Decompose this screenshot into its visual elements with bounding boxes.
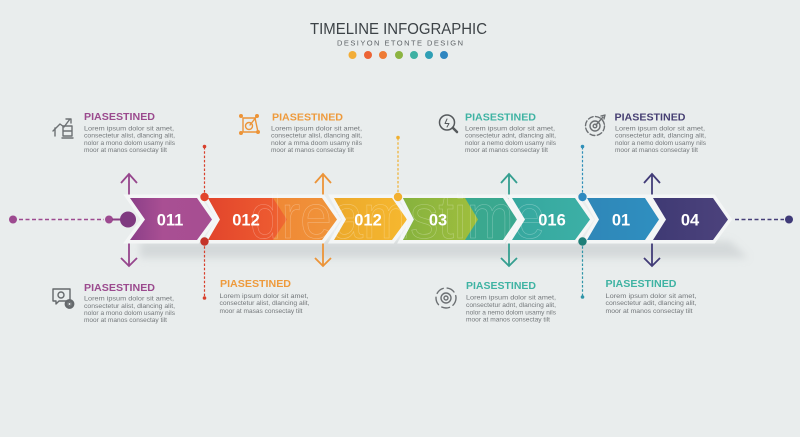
segment numbers: 01: [612, 212, 630, 230]
marker: dark red bottom: [200, 237, 209, 300]
text block: top 3: moor at manos consectay tilt: [465, 147, 548, 154]
text block: top 1: nolor a mono dolom usamy nils: [84, 140, 176, 147]
icon: target nodes: [240, 115, 259, 134]
arrow: orange up and down: [315, 174, 331, 266]
arrow: navy up and down: [644, 174, 660, 266]
text block: bottom 3: [466, 280, 557, 324]
text block: bottom 1: PIASESTINED: [84, 282, 155, 294]
segment numbers: 016: [538, 212, 566, 230]
text block: top 3: consectetur adnt, dlancing alit,: [465, 132, 556, 140]
text block: bottom 4: Lorem ipsum dolor sit amet,: [606, 293, 697, 300]
segment 016 teal: [512, 198, 590, 240]
vertical arrows: [121, 174, 660, 266]
segment 011 purple: [130, 198, 212, 240]
band shadow: [140, 241, 748, 258]
text block: bottom 2: consectetur alist, dlancing alit,: [220, 300, 310, 307]
segment numbers: [157, 212, 700, 230]
text block: bottom 4: [606, 278, 697, 315]
marker: blue top: [578, 145, 587, 201]
text block: bottom 3: moor at manos consectay tilt: [466, 316, 550, 324]
text block: top 4: nolor a nemo dolom usamy nils: [615, 140, 707, 147]
segment 01 blue: [587, 198, 659, 240]
text block: bottom 4: PIASESTINED: [606, 278, 677, 290]
dotted markers: [200, 136, 587, 300]
arrow: teal up and down: [501, 174, 517, 266]
segment numbers: 012: [232, 212, 260, 230]
marker: yellow top: [394, 136, 402, 201]
text block: top 3: PIASESTINED: [465, 112, 536, 124]
text block: bottom 3: consectetur adnt, dlancing alit,: [466, 302, 556, 309]
segment 012 red: [208, 198, 287, 240]
title block: [310, 21, 487, 59]
text block: bottom 4: consectetur adit, dlancing alit,: [606, 300, 697, 307]
text block: bottom 1: [84, 282, 176, 324]
segment numbers: 03: [429, 212, 447, 230]
text block: top 3: Lorem ipsum dolor sit amet,: [465, 126, 555, 132]
text block: top 4: Lorem ipsum dolor sit amet,: [615, 126, 705, 132]
text block: bottom 2: [220, 278, 310, 315]
text block: top 2: [271, 112, 363, 154]
text block: bottom 1: consectetur alist, dlancing alit,: [84, 303, 175, 310]
text block: top 4: consectetur adit, dlancing alit,: [615, 132, 706, 140]
text block: bottom 1: nolor a mono dolom usamy nils: [84, 310, 176, 317]
subtitle: DESIYON ETONTE DESIGN: [337, 38, 463, 48]
text block: bottom 3: PIASESTINED: [466, 280, 536, 292]
title: TIMELINE INFOGRAPHIC: [310, 21, 487, 38]
text block: top 4: PIASESTINED: [614, 112, 686, 124]
left connector line: [9, 212, 136, 228]
text block: top 1: Lorem ipsum dolor sit amet,: [84, 126, 174, 132]
watermark: dreamstime: [250, 183, 545, 252]
text block: top 1: [84, 111, 176, 154]
icon: screen and gear: [53, 289, 73, 308]
icon: magnifier: [440, 115, 457, 132]
text block: top 1: consectetur alist, dlancing alit,: [84, 132, 175, 140]
text block: bottom 1: Lorem ipsum dolor sit amet,: [84, 296, 174, 302]
text block: top 1: PIASESTINED: [84, 111, 155, 123]
text block: top 1: moor at manos consectay tilt: [84, 147, 167, 154]
text block: top 2: Lorem ipsum dolor sit amet,: [271, 126, 362, 132]
segment 03 teal-green tail: [403, 198, 517, 240]
text block: bottom 2: Lorem ipsum dolor sit amet,: [220, 293, 309, 300]
text block: bottom 4: moor at manos consectay tilt: [606, 308, 693, 315]
segment 03 lime: [403, 198, 478, 240]
text block: top 2: consectetur alisl, dlancing alit,: [271, 132, 362, 140]
text block: bottom 1: moor at manos consectay tilt: [84, 317, 167, 324]
text block: bottom 2: PIASESTINED: [220, 278, 291, 290]
arrow: purple up and down: [121, 174, 137, 266]
text block: top 3: nolor a nemo dolom usamy nils: [465, 140, 557, 147]
segment 04 navy: [653, 198, 728, 240]
text block: top 2: nolor a mma doom usamy nils: [271, 140, 363, 147]
segment 012 yellow: [334, 198, 407, 240]
segment numbers: 012: [354, 212, 382, 230]
text block: top 2: PIASESTINED: [272, 112, 343, 124]
icon: target with arrow: [586, 115, 605, 136]
text block: top 2: moor at manos consectay tilt: [271, 147, 354, 154]
text block: bottom 3: Lorem ipsum dolor sit amet,: [466, 294, 556, 302]
text block: bottom 2: moor at masas consectay tilt: [220, 308, 303, 315]
segment 012 orange: [208, 198, 337, 240]
text block: bottom 3: nolor a nemo dolom usamy nils: [466, 310, 557, 316]
text block: top 4: [614, 112, 707, 154]
icon: dashed ring: [436, 288, 456, 308]
arrow band: [130, 198, 728, 240]
segment numbers: 04: [681, 212, 700, 230]
segment numbers: 011: [157, 212, 183, 230]
colour dots: [348, 51, 448, 59]
text block: top 4: moor at manos consectay tilt: [615, 147, 698, 154]
right connector line: [735, 216, 793, 224]
marker: red top: [200, 145, 209, 201]
text block: top 3: [465, 112, 557, 154]
marker: teal bottom: [578, 237, 587, 299]
icon: chart and stack: [53, 119, 73, 138]
